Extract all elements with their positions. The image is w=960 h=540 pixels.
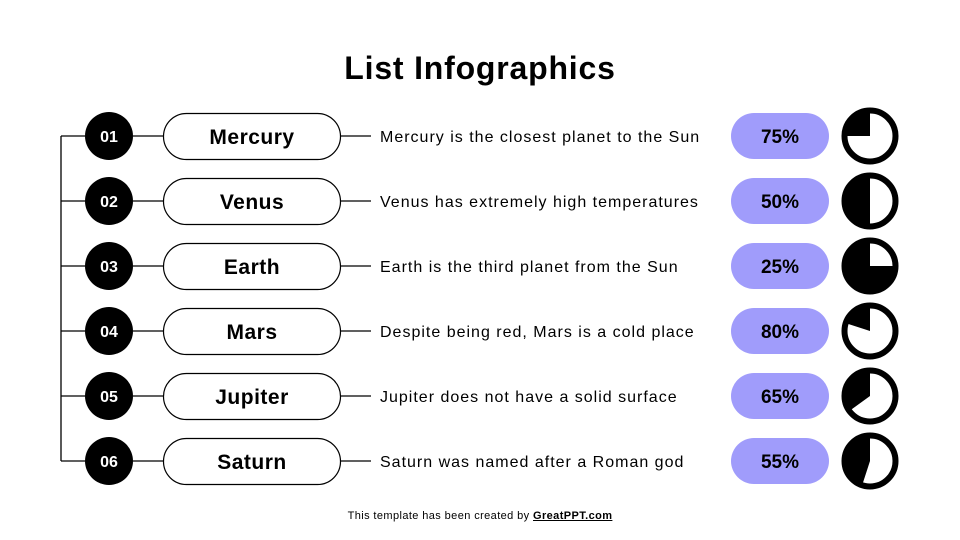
row 1: Mercury is the closest planet to the Sun <box>380 129 700 146</box>
row 5: 65% <box>761 387 799 408</box>
row 3: Earth <box>224 256 280 279</box>
row 3: 03 <box>100 259 118 276</box>
row 3 <box>61 240 896 292</box>
row 6 <box>61 435 896 486</box>
title: List Infographics <box>344 50 616 86</box>
row 2: Venus has extremely high temperatures <box>380 194 699 211</box>
row 4 <box>61 305 896 356</box>
row 5: 05 <box>100 389 118 406</box>
row 5: Jupiter does not have a solid surface <box>380 389 678 406</box>
row 4: Despite being red, Mars is a cold place <box>380 324 695 341</box>
row 4: Mars <box>226 321 278 344</box>
row 4: 80% <box>761 322 799 343</box>
row 1: 01 <box>100 129 118 146</box>
row 1: Mercury <box>209 126 295 149</box>
row 2: 02 <box>100 194 118 211</box>
row 6: 06 <box>100 454 118 471</box>
row 2: 50% <box>761 192 799 213</box>
row 6: Saturn was named after a Roman god <box>380 454 684 471</box>
row 3: Earth is the third planet from the Sun <box>380 259 679 276</box>
row 3: 25% <box>761 257 799 278</box>
row 6: 55% <box>761 452 799 473</box>
row 5 <box>61 370 896 422</box>
row 2: Venus <box>220 191 284 214</box>
row 5: Jupiter <box>215 386 289 409</box>
row 2 <box>61 175 896 227</box>
footer credit: This template has been created by GreatPPT.com <box>348 510 612 522</box>
row 1 <box>61 110 896 162</box>
row 6: Saturn <box>217 451 287 474</box>
row 1: 75% <box>761 127 799 148</box>
row 4: 04 <box>100 324 118 341</box>
